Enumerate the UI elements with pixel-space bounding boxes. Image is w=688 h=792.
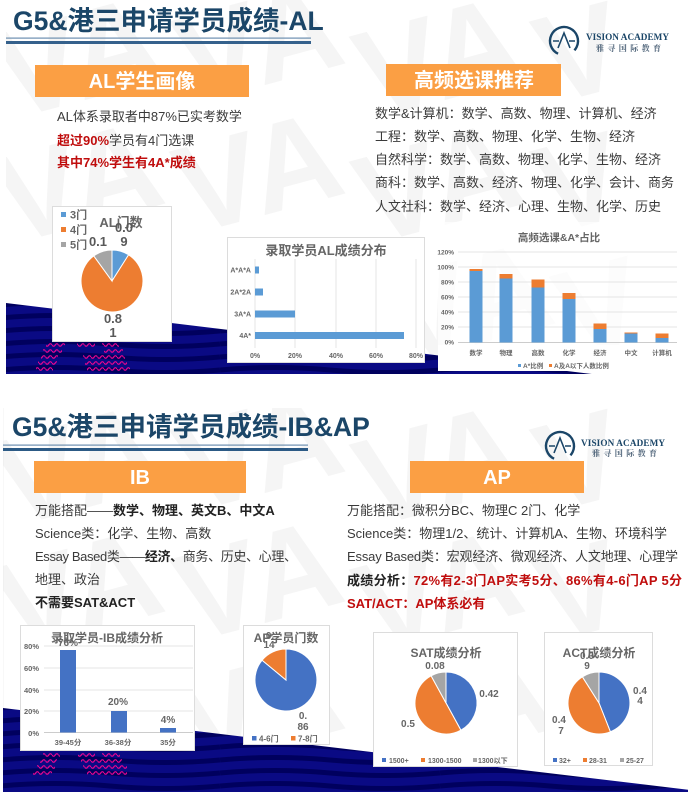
y axis labels: 20% (24, 707, 39, 716)
data labels: 0.4 (633, 686, 647, 697)
category labels: 35分 (160, 737, 176, 747)
text block: recommended courses: 自然科学：数学、高数、物理、化学、生物、经济 (375, 152, 661, 167)
value axis labels: 20% (288, 353, 303, 360)
chart title: 录取学员AL成绩分布 (265, 243, 387, 258)
category labels (230, 268, 251, 340)
data labels: 0.1 (89, 234, 107, 249)
y axis labels: 40% (24, 686, 39, 695)
slide background: IB and AP: VA (371, 619, 566, 792)
bars (60, 650, 176, 732)
legend: 4门 (70, 222, 87, 236)
slide background: AL: VA (371, 214, 566, 391)
text block: recommended courses (375, 106, 674, 214)
text block: AP: SAT/ACT：AP体系必有 (347, 596, 485, 611)
data labels (263, 631, 309, 733)
data labels: 9 (120, 234, 128, 249)
data labels: 0.08 (425, 661, 445, 672)
A* bars (470, 271, 668, 342)
heading: recommended courses: 高频选课推荐 (414, 68, 534, 92)
category labels: 物理 (500, 348, 513, 357)
slide background: AL: VA (341, 94, 536, 271)
pie chart: SAT score analysis (374, 632, 518, 766)
value axis labels (250, 353, 424, 360)
text block: IB: Science类：化学、生物、高数 (35, 526, 211, 541)
legend: 28-31 (589, 758, 607, 765)
pie chart: AP course count (244, 626, 330, 744)
logo: Vision Academy top (545, 22, 669, 60)
y axis labels: 20% (441, 324, 454, 332)
legend: 7-8门 (298, 734, 318, 744)
chart title: AP学员门数 (254, 630, 318, 645)
value axis labels: 0% (250, 353, 261, 360)
data labels: 1 (109, 325, 117, 340)
text block: IB: Essay Based类——经济、商务、历史、心理、 (35, 549, 297, 564)
legend: 1300以下 (478, 757, 508, 765)
legend: 32+ (559, 758, 571, 765)
value axis labels: 40% (329, 353, 344, 360)
legend: 3门 (70, 208, 87, 222)
slide background: IB and AP: VA (161, 362, 356, 539)
text block: AP: Essay Based类：宏观经济、微观经济、人文地理、心理学 (347, 549, 678, 564)
data labels: 0.42 (479, 689, 499, 700)
data labels (401, 661, 499, 730)
category labels: 化学 (562, 348, 576, 357)
y axis labels: 0% (445, 340, 454, 346)
chart title: SAT成绩分析 (410, 645, 482, 660)
category labels: 2A*2A (230, 290, 251, 296)
bar chart: IB score analysis (20, 626, 194, 750)
data labels: 7 (558, 726, 564, 737)
data labels (552, 651, 647, 737)
text block: IB (35, 503, 297, 610)
y axis labels: 0% (28, 729, 39, 738)
y axis labels: 40% (441, 310, 454, 316)
chart title: 录取学员-IB成绩分析 (51, 630, 163, 645)
pie chart: AL course count (52, 206, 172, 342)
slide background: AL (6, 0, 607, 374)
data labels: 0. (266, 631, 274, 642)
heading: AL student profile (35, 65, 249, 97)
title: IB and AP: G5&港三申请学员成绩-IB&AP (12, 412, 370, 442)
category labels: 39-45分 (55, 737, 82, 747)
legend: 1300-1500 (428, 758, 462, 765)
slide background: AL: V (541, 230, 658, 386)
text block: AL student profile: 超过90%学员有4门选课 (57, 133, 194, 148)
slide background: IB and AP: V (521, 383, 638, 539)
data labels: 4% (161, 715, 175, 726)
y axis labels (437, 250, 454, 346)
legend (518, 361, 609, 370)
category labels: 3A*A (234, 312, 251, 318)
category labels: 4A* (239, 333, 251, 340)
text block: recommended courses: 工程：数学、高数、物理、化学、生物、经济 (375, 129, 635, 144)
heading: AL student profile: AL学生画像 (89, 70, 195, 93)
text block: AP (347, 503, 682, 611)
data labels: 0.0 (580, 651, 594, 662)
pie chart: ACT score analysis (544, 632, 652, 766)
y axis labels: 80% (24, 642, 39, 651)
slide background: IB and AP: V (521, 513, 638, 669)
data labels: 86 (297, 722, 309, 733)
data labels: 76% (58, 638, 78, 649)
heading: IB (34, 461, 246, 493)
text block: AP: 成绩分析：72%有2-3门AP实考5分、86%有4-6门AP 5分 (347, 573, 682, 588)
slide background: AL: VA (161, 84, 356, 261)
data labels: 0.4 (552, 715, 566, 726)
pie (81, 250, 143, 312)
text block: AP: Science类：物理1/2、统计、计算机A、生物、环境科学 (347, 526, 667, 541)
heading: AP (410, 461, 584, 493)
data labels: 0. (299, 711, 307, 722)
text block: AL student profile: 其中74%学生有4A*成绩 (57, 155, 196, 170)
legend: A*比例 (523, 361, 544, 370)
category labels (470, 348, 672, 357)
text block: AL student profile: AL体系录取者中87%已实考数学 (57, 109, 242, 124)
category labels: 经济 (594, 348, 607, 357)
data labels: 9 (584, 661, 590, 672)
category labels: 36-38分 (105, 737, 132, 747)
logo name: VISION ACADEMY (586, 32, 669, 42)
data labels: 0.8 (104, 311, 122, 326)
chart title: ACT成绩分析 (563, 645, 635, 660)
category labels: A*A*A (230, 268, 251, 274)
legend: 4-6门 (259, 734, 279, 744)
legend: 25-27 (626, 758, 644, 765)
data labels: 0.5 (401, 719, 415, 730)
category labels (55, 737, 176, 747)
slide background: IB and AP: VA (341, 502, 536, 679)
title underline: AL (6, 38, 311, 44)
heading: AP: AP (483, 467, 511, 489)
text block: IB: 地理、政治 (35, 572, 100, 587)
pie (415, 672, 477, 734)
y axis labels: 80% (441, 280, 454, 286)
legend (553, 758, 644, 765)
y axis labels: 120% (437, 250, 454, 256)
logo subtitle: 雅寻国际教育 (592, 448, 657, 458)
data labels (89, 220, 133, 340)
logo name: VISION ACADEMY (581, 438, 665, 448)
value axis labels: 80% (409, 353, 424, 360)
bars (255, 266, 404, 339)
legend (252, 734, 318, 744)
A and below bars (470, 269, 668, 338)
logo subtitle: 雅寻国际教育 (596, 43, 661, 53)
slide background: IB and AP: VA (341, 377, 536, 554)
value axis labels: 60% (369, 353, 384, 360)
slide background: IB and AP: V (541, 640, 658, 792)
chart title: AL门数 (99, 215, 143, 230)
data labels (58, 638, 175, 726)
slide background: IB and AP: VA (161, 619, 356, 792)
text block: AP: 万能搭配：微积分BC、物理C 2门、化学 (347, 503, 580, 518)
slide background: AL: V (521, 105, 638, 261)
data labels: 20% (108, 697, 128, 708)
slide background: IB and AP (3, 408, 688, 792)
y axis labels: 100% (437, 264, 454, 272)
y axis labels (24, 642, 39, 738)
icon: logo circle (545, 22, 583, 60)
heading: recommended courses (386, 64, 561, 96)
legend: 1500+ (389, 758, 409, 765)
stacked bar chart: A* share by course (437, 222, 688, 371)
title: AL: G5&港三申请学员成绩-AL (13, 6, 324, 36)
text block: IB: 不需要SAT&ACT (35, 595, 135, 610)
pie (568, 672, 630, 734)
bar chart: AL score distribution (228, 238, 424, 362)
category labels: 中文 (624, 348, 638, 357)
category labels: 数学 (470, 348, 483, 357)
text block: AL student profile (57, 109, 242, 170)
chart title: 高频选课&A*占比 (518, 231, 601, 244)
slide background: IB and AP: VA (161, 492, 356, 669)
legend (61, 208, 87, 252)
title underline: IB and AP (3, 444, 308, 451)
data labels: 4 (637, 696, 643, 707)
legend: A及A以下人数比例 (554, 361, 609, 370)
category labels: 计算机 (652, 348, 672, 357)
data labels: 0.0 (115, 220, 133, 235)
y axis labels: 60% (24, 664, 39, 673)
pie (255, 649, 317, 711)
text block: recommended courses: 商科：数学、高数、经济、物理、化学、会计、商务 (375, 175, 674, 190)
icon: logo circle (541, 427, 579, 465)
legend (382, 757, 508, 765)
text block: recommended courses: 人文社科：数学、经济、心理、生物、化学、历史 (375, 199, 661, 214)
y axis labels: 60% (441, 294, 454, 302)
text block: recommended courses: 数学&计算机：数学、高数、物理、计算机、经济 (375, 106, 657, 121)
text block: IB: 万能搭配——数学、物理、英文B、中文A (35, 503, 275, 518)
legend: 5门 (70, 238, 87, 252)
logo: Vision Academy bottom (541, 427, 665, 465)
heading: IB: IB (130, 467, 150, 489)
data labels: 14 (263, 640, 275, 651)
category labels: 高数 (532, 348, 545, 357)
